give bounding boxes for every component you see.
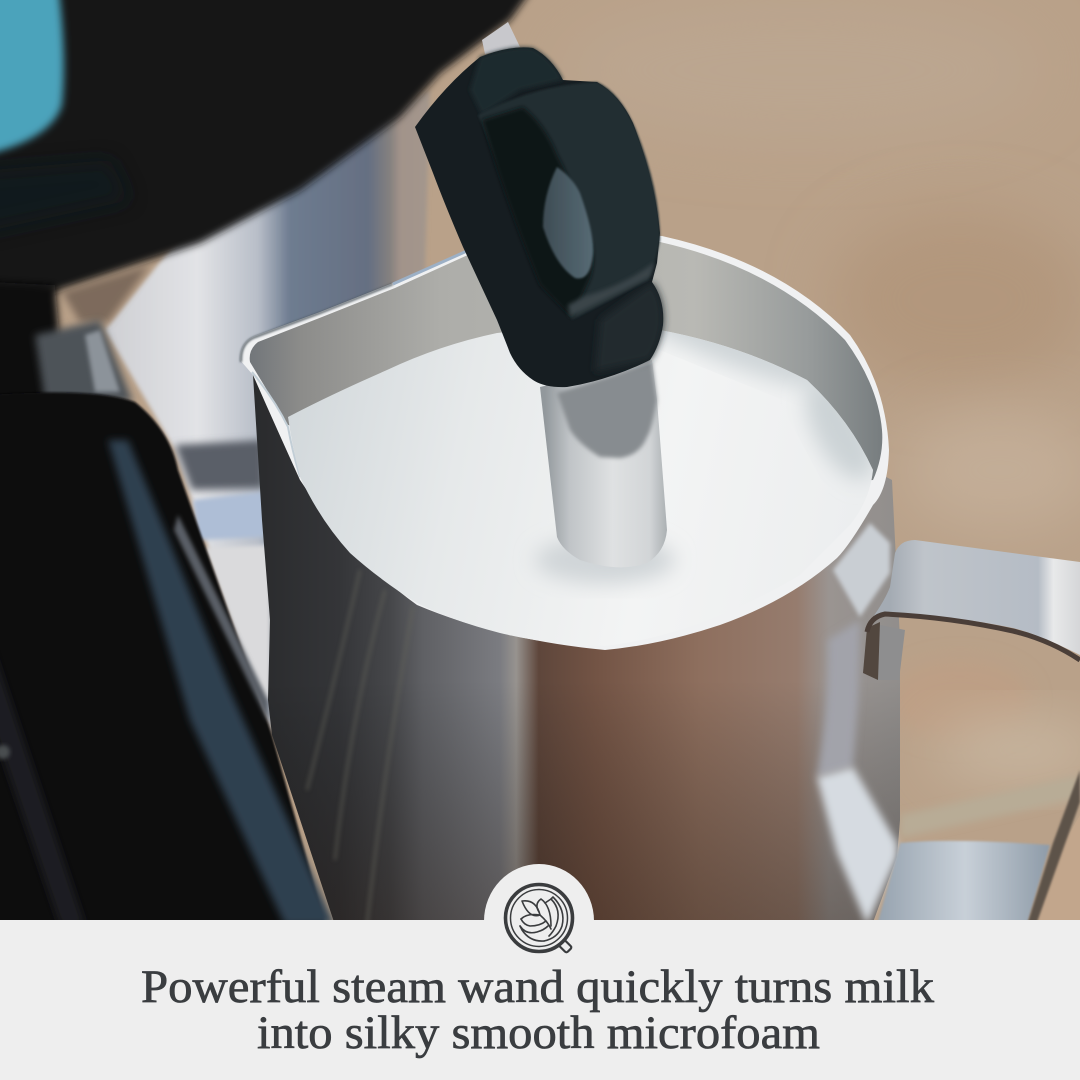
pitcher base highlight [817,767,897,925]
steel collar by wand [482,22,520,54]
pitcher body [253,375,900,925]
pitcher lower silver band [817,620,860,777]
caption text: Powerful steam wand quickly turns milk [141,961,935,1013]
icon badge background [484,864,594,921]
caption text [141,961,935,1059]
milk foam surface [288,330,873,640]
chrome fitting [35,320,133,402]
espresso machine steel backdrop [105,90,430,735]
caption panel [0,864,1080,1080]
icon: latte art cup [506,884,572,953]
steam wand tube [540,360,667,567]
grip recess [482,107,593,318]
milk pitcher [240,235,1080,925]
grip loop band [478,82,660,320]
rim edge on spout side [241,251,467,477]
pitcher handle [863,540,1080,925]
caption text: into silky smooth microfoam [257,1007,820,1059]
blue reflection band [108,440,335,925]
grip lower edge highlight [568,262,655,317]
steam wand rubber grip [415,47,663,387]
espresso machine top dark housing [0,0,560,320]
espresso machine lower dark body [0,265,335,960]
pitcher rim [240,235,889,650]
brushed streaks on body [307,570,413,925]
tube reflection [557,362,657,458]
pitcher upper right reflection [833,523,890,617]
teal display [0,0,64,160]
grip loop opening [543,167,593,279]
shadow under display [0,160,130,235]
pitcher inner wall [250,241,882,500]
